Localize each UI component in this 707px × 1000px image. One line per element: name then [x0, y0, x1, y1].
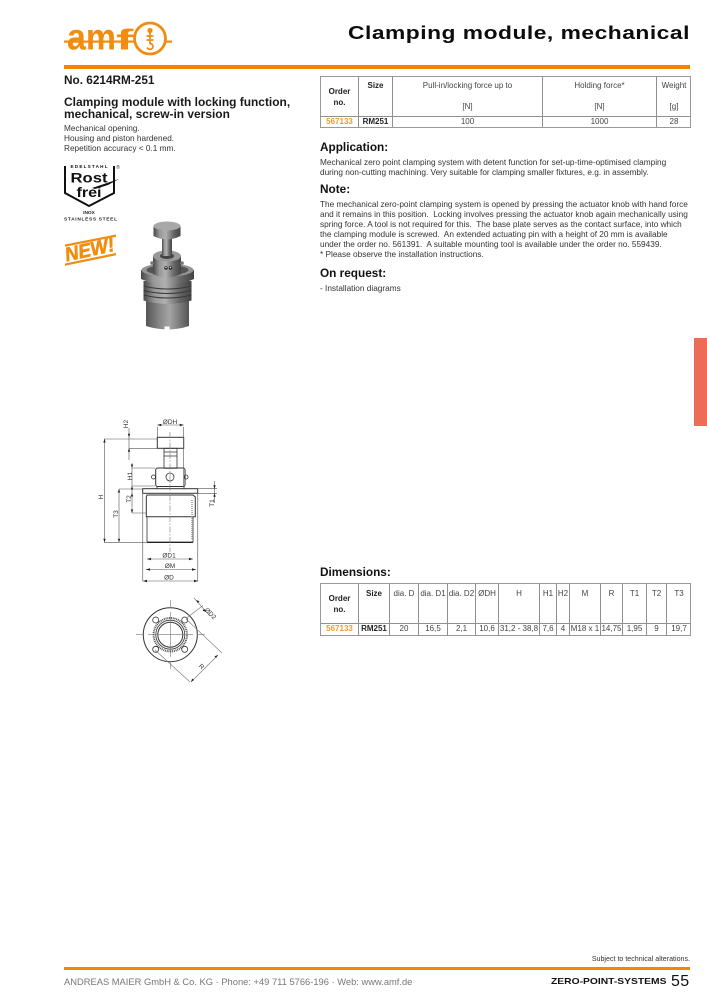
technical drawing: bottom view — [136, 598, 222, 682]
table: dimensions: 4 — [561, 624, 565, 633]
badge: Rostfrei inox stainless steel: frei — [76, 185, 102, 200]
table: forces: 1000 — [591, 117, 608, 126]
technical drawing: side view: T3 — [113, 510, 120, 518]
footer rule — [64, 967, 690, 970]
logo: amf — [64, 16, 172, 58]
technical drawing: side view: ØDH — [163, 419, 178, 426]
product photo — [141, 222, 194, 330]
table: dimensions: T1 — [630, 589, 639, 598]
table: forces: Weight — [662, 81, 686, 90]
table: dimensions: T2 — [652, 589, 661, 598]
heading: note: Note: — [320, 182, 350, 196]
table: dimensions: T3 — [674, 589, 684, 598]
heading: application: Application: — [320, 140, 388, 154]
text: note: under the order no. 561391. A suitable mounting tool is available under the order no. 559439. — [320, 240, 662, 249]
technical drawing: side view: H — [98, 494, 105, 499]
text: note: the clamping module is screwed. An extended actuating pin with a height of 20 mm is available — [320, 230, 668, 239]
product description: Housing and piston hardened. — [64, 134, 174, 143]
product description — [64, 124, 176, 153]
table: dimensions: no. — [334, 605, 346, 614]
text: note: and it remains in this position. Locking involves pressing the actuator knob again mechanically using — [320, 210, 688, 219]
technical drawing: side view — [98, 419, 217, 582]
table: dimensions: 14,75 — [601, 624, 622, 633]
table: dimensions: ØDH — [478, 589, 496, 598]
table: dimensions: Order — [329, 594, 350, 603]
badge: NEW!: NEW! — [63, 234, 117, 266]
badge: Rostfrei inox stainless steel — [64, 164, 120, 222]
table: dimensions: 16,5 — [425, 624, 441, 633]
table: dimensions: RM251 — [361, 624, 387, 633]
text: application — [320, 158, 666, 177]
text: note: * Please observe the installation instructions. — [320, 250, 484, 259]
table: forces: Holding force* — [574, 81, 625, 90]
table: dimensions: H2 — [558, 589, 568, 598]
badge: Rostfrei inox stainless steel: ® — [116, 164, 120, 171]
text: note: spring force. A tool is not required for this. The base plate serves as the contact surface, into which — [320, 220, 682, 229]
product description: Repetition accuracy < 0.1 mm. — [64, 144, 176, 153]
text: application: Mechanical zero point clamping system with detent function for set-up-time-optimised clamping — [320, 158, 666, 167]
table: forces: Pull-in/locking force up to — [423, 81, 512, 90]
text: application: during non-cutting machining. Very suitable for clamping smaller fixtures, e.g. in assembly. — [320, 168, 649, 177]
table: dimensions: R — [609, 589, 614, 598]
table: forces: [N] — [594, 102, 605, 111]
table: forces: no. — [334, 98, 346, 107]
technical drawing: side view: H2 — [123, 419, 130, 428]
table: dimensions: M18 x 1 — [571, 624, 599, 633]
product number: No. 6214RM-251 — [64, 73, 154, 87]
title: Clamping module, mechanical — [348, 23, 690, 43]
table: forces: [N] — [462, 102, 473, 111]
table: dimensions: 7,6 — [542, 624, 554, 633]
technical drawing: side view: ØD — [164, 574, 174, 582]
badge: Rostfrei inox stainless steel: STAINLESS STEEL — [64, 216, 117, 222]
logo: amf: am — [67, 16, 116, 58]
technical drawing: side view: H1 — [127, 471, 134, 480]
technical drawing: side view: ØM — [165, 563, 175, 570]
table: dimensions: 567133 — [326, 624, 353, 633]
footer: section name: ZERO-POINT-SYSTEMS — [551, 976, 666, 986]
table: dimensions: 1,95 — [627, 624, 642, 633]
technical drawing: bottom view: R — [197, 663, 205, 671]
badge: Rostfrei inox stainless steel: INOX — [83, 210, 96, 216]
text: on request: - Installation diagrams — [320, 284, 401, 293]
product heading: mechanical, screw-in version — [64, 107, 230, 121]
table: forces — [320, 76, 691, 128]
table: dimensions: 2,1 — [456, 624, 467, 633]
footer: page number: 55 — [671, 973, 689, 990]
product description: Mechanical opening. — [64, 124, 140, 133]
note: subject to alterations: Subject to technical alterations. — [592, 955, 690, 963]
technical drawing: side view: ØD1 — [162, 552, 176, 560]
table: forces: Order — [329, 87, 350, 96]
table: forces: 100 — [461, 117, 474, 126]
table: dimensions: 10,6 — [479, 624, 495, 633]
table: dimensions: Size — [366, 589, 382, 598]
footer: company address: ANDREAS MAIER GmbH & Co. KG · Phone: +49 711 5766-196 · Web: www.amf.de — [64, 977, 412, 987]
table: dimensions: 19,7 — [671, 624, 687, 633]
table: forces: RM251 — [363, 117, 388, 126]
technical drawing: side view: T1 — [209, 499, 216, 507]
product heading: Clamping module with locking function, — [64, 94, 290, 108]
table: dimensions: 31,2 - 38,8 — [500, 624, 538, 633]
text: note — [320, 200, 688, 259]
table: dimensions: 9 — [654, 624, 659, 633]
table: dimensions — [320, 583, 691, 636]
table: dimensions: H — [516, 589, 522, 598]
badge: Rostfrei inox stainless steel: Rost — [70, 170, 108, 186]
heading: dimensions: Dimensions: — [320, 565, 391, 579]
heading: on request: On request: — [320, 266, 386, 280]
table: dimensions: 20 — [400, 624, 408, 633]
table: dimensions: M — [582, 589, 588, 598]
table: forces: Size — [367, 81, 384, 90]
table: forces: [g] — [670, 102, 678, 111]
product heading — [64, 94, 290, 121]
technical drawing: side view: T2 — [126, 495, 133, 503]
header rule — [64, 65, 690, 69]
logo: amf: f — [116, 23, 135, 56]
table: dimensions: dia. D2 — [449, 589, 474, 598]
technical drawing: bottom view: ØD2 — [203, 607, 218, 621]
table: forces: 567133 — [326, 117, 353, 126]
side tab — [694, 338, 707, 426]
table: dimensions: H1 — [543, 589, 553, 598]
badge: Rostfrei inox stainless steel: EDELSTAHL — [70, 164, 108, 169]
text: note: The mechanical zero-point clamping system is opened by pressing the actuator knob with hand force — [320, 200, 688, 209]
table: dimensions: dia. D1 — [420, 589, 446, 598]
table: forces: 28 — [670, 117, 678, 126]
table: dimensions: dia. D — [394, 589, 414, 598]
